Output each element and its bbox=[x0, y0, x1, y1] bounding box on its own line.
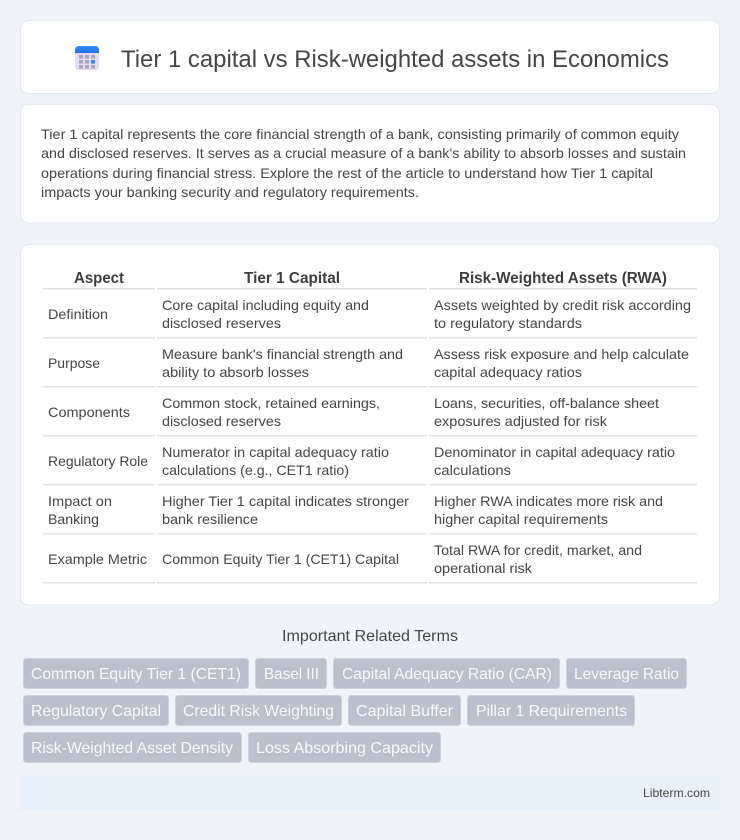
table row: Definition: Core capital including equity and bbox=[162, 297, 369, 313]
chip: Regulatory Capital bbox=[24, 696, 168, 726]
chip: Leverage Ratio bbox=[566, 658, 686, 688]
table row: Definition bbox=[48, 297, 691, 331]
chip: Basel III: Basel III bbox=[264, 666, 319, 683]
panel: introduction bbox=[20, 104, 720, 223]
chip: Capital Buffer bbox=[348, 696, 460, 726]
related term chips bbox=[24, 658, 686, 762]
text block: introduction paragraph: and disclosed reserves. It serves as a crucial measure of a bank's ability to absorb losses and sustain bbox=[41, 145, 686, 161]
chip: Regulatory Capital: Regulatory Capital bbox=[31, 703, 161, 720]
panel: title card bbox=[20, 20, 720, 94]
title: Tier 1 capital vs Risk-weighted assets in Economics bbox=[121, 46, 669, 73]
panel: comparison table bbox=[20, 244, 720, 605]
table row: Example Metric: Common Equity Tier 1 (CET1) Capital bbox=[162, 551, 399, 567]
table row: Components: disclosed reserves bbox=[162, 413, 281, 429]
chip: Credit Risk Weighting: Credit Risk Weighting bbox=[183, 703, 334, 720]
table row: Impact on Banking: Higher Tier 1 capital indicates stronger bbox=[162, 493, 409, 509]
table row: Impact on Banking: Higher RWA indicates more risk and bbox=[434, 493, 663, 509]
table row: Example Metric bbox=[48, 542, 642, 576]
text block: introduction paragraph: operations during financial stress. Explore the rest of the article to understand how Tier 1 capital bbox=[41, 165, 653, 181]
chip: Capital Adequacy Ratio (CAR): Capital Adequacy Ratio (CAR) bbox=[342, 666, 552, 683]
table row: Example Metric: operational risk bbox=[434, 560, 533, 576]
chip: Loss Absorbing Capacity: Loss Absorbing Capacity bbox=[256, 740, 433, 757]
table row: Definition: to regulatory standards bbox=[434, 315, 582, 331]
table row: Impact on Banking bbox=[48, 493, 663, 527]
table header: Risk-Weighted Assets (RWA) bbox=[459, 270, 667, 287]
table row: Definition: Assets weighted by credit risk according bbox=[434, 297, 691, 313]
table row: Purpose: Assess risk exposure and help calculate bbox=[434, 346, 689, 362]
table row: Definition: disclosed reserves bbox=[162, 315, 281, 331]
table header bbox=[74, 270, 667, 287]
table row: Regulatory Role: calculations bbox=[434, 462, 511, 478]
table row: Purpose: ability to absorb losses bbox=[162, 364, 309, 380]
text block: introduction paragraph bbox=[41, 126, 686, 200]
chip: Risk-Weighted Asset Density bbox=[24, 732, 242, 762]
table row: Example Metric: Total RWA for credit, market, and bbox=[434, 542, 642, 558]
footer credit: Libterm.com bbox=[643, 786, 710, 800]
chip: Loss Absorbing Capacity bbox=[248, 732, 440, 762]
table row: Regulatory Role: Regulatory Role bbox=[48, 453, 148, 469]
table row: Definition: Definition bbox=[48, 306, 108, 322]
table header: Tier 1 Capital bbox=[244, 270, 340, 287]
table row: Impact on Banking: Impact on bbox=[48, 493, 112, 509]
table row: Purpose: capital adequacy ratios bbox=[434, 364, 582, 380]
table row: Impact on Banking: Banking bbox=[48, 511, 99, 527]
table row: Impact on Banking: higher capital requirements bbox=[434, 511, 608, 527]
table row: Components: exposures adjusted for risk bbox=[434, 413, 608, 429]
chip: Risk-Weighted Asset Density: Risk-Weighted Asset Density bbox=[31, 740, 233, 757]
table row: Regulatory Role: Denominator in capital adequacy ratio bbox=[434, 444, 675, 460]
chip: Pillar 1 Requirements bbox=[468, 696, 634, 726]
table row: Regulatory Role: Numerator in capital adequacy ratio bbox=[162, 444, 389, 460]
table row: Purpose: Purpose bbox=[48, 355, 100, 371]
table row: Components: Common stock, retained earnings, bbox=[162, 395, 380, 411]
heading: Important Related Terms: Important Related Terms bbox=[282, 628, 458, 645]
text block: introduction paragraph: Tier 1 capital represents the core financial strength of a bank, consisting primarily of common equity bbox=[41, 126, 679, 142]
table row: Components bbox=[48, 395, 659, 429]
table row: Regulatory Role bbox=[48, 444, 675, 478]
text block: introduction paragraph: impacts your banking security and regulatory requirements. bbox=[41, 184, 419, 200]
chip: Capital Adequacy Ratio (CAR) bbox=[334, 658, 560, 688]
icon: calendar bbox=[75, 46, 99, 70]
table row: Components: Components bbox=[48, 404, 130, 420]
table row: Regulatory Role: calculations (e.g., CET1 ratio) bbox=[162, 462, 349, 478]
table row: Purpose bbox=[48, 346, 689, 380]
footer bbox=[20, 776, 720, 810]
chip: Common Equity Tier 1 (CET1): Common Equity Tier 1 (CET1) bbox=[31, 666, 241, 683]
table row: Components: Loans, securities, off-balance sheet bbox=[434, 395, 659, 411]
table row: Example Metric: Example Metric bbox=[48, 551, 147, 567]
table header: Aspect bbox=[74, 270, 124, 287]
chip: Basel III bbox=[256, 658, 326, 688]
table row: Impact on Banking: bank resilience bbox=[162, 511, 258, 527]
chip: Leverage Ratio: Leverage Ratio bbox=[574, 666, 679, 683]
chip: Pillar 1 Requirements: Pillar 1 Requirements bbox=[476, 703, 627, 720]
table row: Purpose: Measure bank's financial strength and bbox=[162, 346, 403, 362]
chip: Common Equity Tier 1 (CET1) bbox=[24, 658, 248, 688]
chip: Capital Buffer: Capital Buffer bbox=[356, 703, 454, 720]
chip: Credit Risk Weighting bbox=[176, 696, 342, 726]
